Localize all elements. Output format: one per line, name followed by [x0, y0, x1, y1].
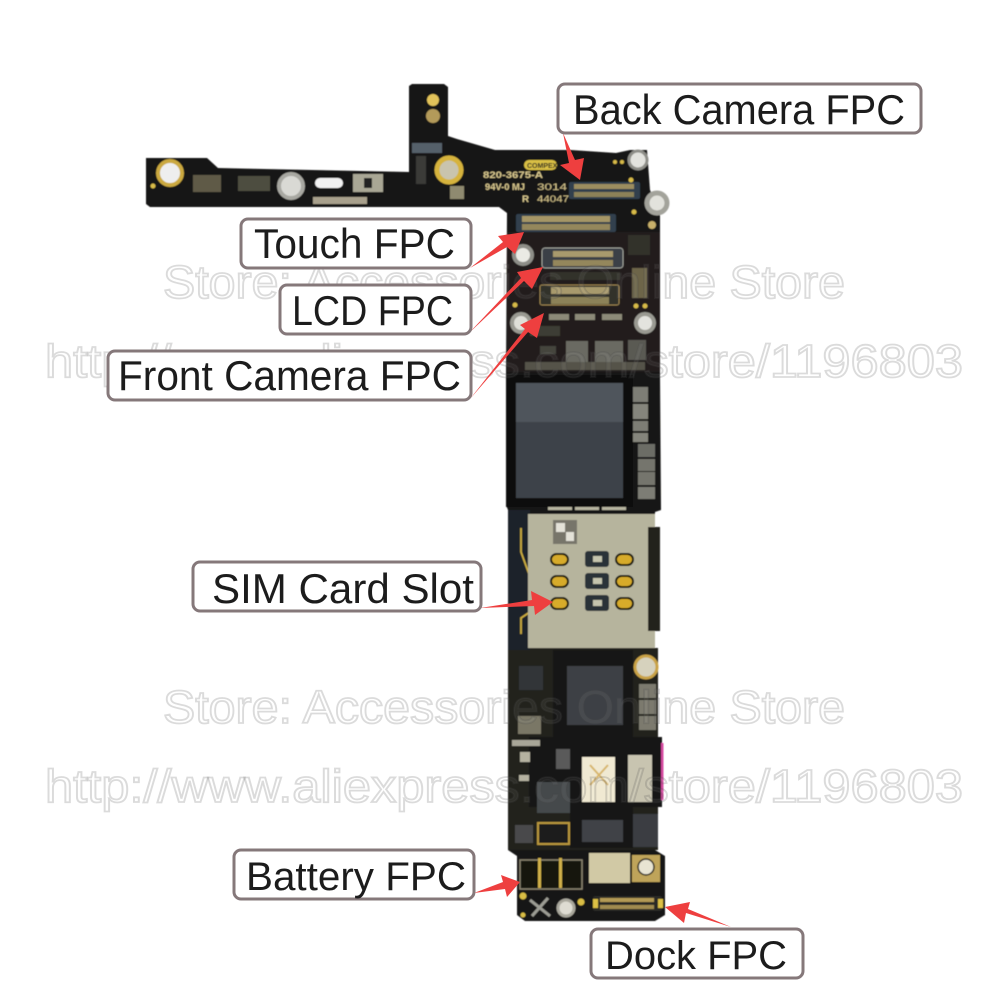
silkscreen markings: 820-3675-A [483, 170, 544, 180]
SIM card slot [508, 507, 660, 650]
mounting washers [512, 151, 667, 332]
silkscreen markings [483, 160, 569, 204]
silkscreen markings: COMPEX [527, 163, 558, 170]
dock connector [593, 896, 663, 911]
side chips beside CPU [633, 387, 655, 499]
watermarks: Store: Accessories Online Store [163, 681, 845, 733]
board outline: top strip and upper body [146, 84, 665, 921]
silkscreen markings: 3014 [537, 182, 567, 192]
antenna tab [412, 94, 442, 184]
small parts upper body [512, 160, 650, 370]
silkscreen markings: 94V-0 MJ [485, 182, 525, 192]
watermarks [45, 256, 963, 812]
lower board texture [508, 648, 658, 850]
logic board [146, 84, 667, 921]
radio and baseband chips [529, 650, 664, 848]
arrow: SIM card slot [480, 591, 553, 615]
silkscreen markings: R [522, 194, 530, 204]
camera bracket block [589, 853, 660, 883]
touch connector [516, 214, 616, 232]
label: Battery FPC: Battery FPC [246, 855, 466, 899]
label: LCD FPC: LCD FPC [292, 287, 453, 334]
silkscreen markings: 44047 [537, 194, 569, 204]
watermarks: http://www.aliexpress.com/store/1196803 [45, 335, 963, 387]
LCD connector [542, 248, 623, 268]
lower left components [512, 666, 656, 844]
back camera connector [569, 182, 640, 199]
watermarks: http://www.aliexpress.com/store/1196803 [45, 760, 963, 812]
arrow: touch FPC [470, 232, 524, 268]
label: Dock FPC: Dock FPC [605, 934, 787, 978]
board texture: upper body [507, 232, 660, 372]
arrow: LCD FPC [468, 267, 543, 334]
top strip components [150, 158, 464, 204]
watermarks: Store: Accessories Online Store [163, 256, 845, 308]
gold mounting hole lower [635, 656, 657, 678]
label: SIM Card Slot: SIM Card Slot [212, 565, 474, 612]
CPU shield [506, 375, 633, 507]
label: Back Camera FPC: Back Camera FPC [573, 86, 905, 133]
arrow: back camera [560, 133, 584, 180]
front camera connector [540, 285, 619, 305]
arrow: battery FPC [474, 875, 520, 897]
battery connector block [520, 858, 584, 918]
arrow: front camera FPC [470, 313, 544, 399]
label: Front Camera FPC: Front Camera FPC [118, 352, 461, 399]
arrow: dock FPC [665, 902, 731, 927]
label: Touch FPC: Touch FPC [254, 220, 455, 267]
